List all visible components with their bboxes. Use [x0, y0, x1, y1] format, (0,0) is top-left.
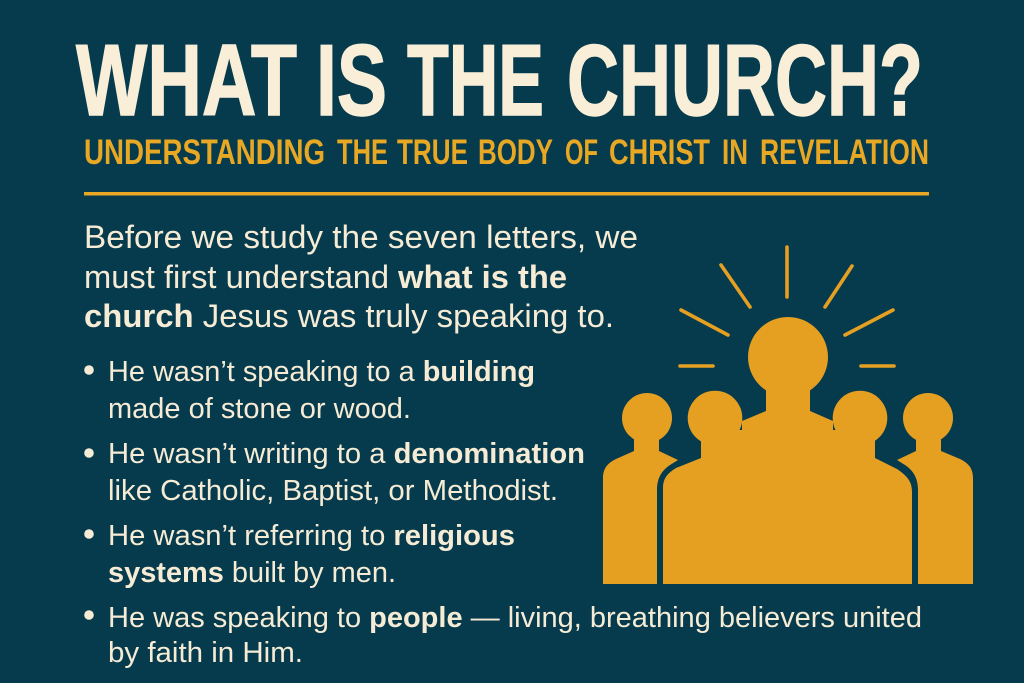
title — [76, 25, 923, 137]
bullet: people: by faith in Him. — [108, 637, 303, 669]
intro paragraph: Before we study the seven letters, we — [84, 219, 638, 255]
bullet: religious systems — [84, 520, 515, 589]
bullet: religious systems: He wasn’t referring to religious — [108, 520, 515, 552]
icon: light rays — [680, 247, 894, 366]
icon: central group of three — [663, 317, 912, 584]
subtitle: CHRIST — [609, 133, 710, 172]
icon: congregation with radiant leader — [603, 247, 973, 584]
bullet: building: He wasn’t speaking to a building — [108, 356, 535, 388]
subtitle: OF — [565, 133, 598, 172]
subtitle: REVELATION — [760, 133, 929, 172]
bullet: building — [84, 356, 535, 425]
subtitle: TRUE — [397, 133, 468, 172]
intro paragraph — [84, 219, 638, 334]
bullet: denomination: like Catholic, Baptist, or Methodist. — [108, 475, 558, 507]
title: IS — [316, 25, 387, 137]
subtitle — [84, 133, 929, 172]
subtitle: UNDERSTANDING — [84, 133, 325, 172]
title: WHAT — [76, 25, 297, 137]
bullet: building: made of stone or wood. — [108, 393, 411, 425]
bullet: denomination — [84, 438, 585, 507]
bullet: people — [84, 602, 922, 669]
intro paragraph: church Jesus was truly speaking to. — [84, 298, 614, 334]
intro paragraph: must first understand what is the — [84, 259, 567, 295]
bullet: denomination: He wasn’t writing to a denomination — [108, 438, 585, 470]
subtitle: THE — [337, 133, 388, 172]
bullet: religious systems: systems built by men. — [108, 557, 396, 589]
icon: outer left person — [603, 393, 678, 584]
subtitle: IN — [722, 133, 748, 172]
divider rule — [84, 192, 929, 196]
bullet: people: He was speaking to people — living, breathing believers united — [108, 602, 922, 634]
icon: outer right person — [897, 393, 973, 584]
subtitle: BODY — [478, 133, 553, 172]
title: THE — [407, 25, 544, 137]
